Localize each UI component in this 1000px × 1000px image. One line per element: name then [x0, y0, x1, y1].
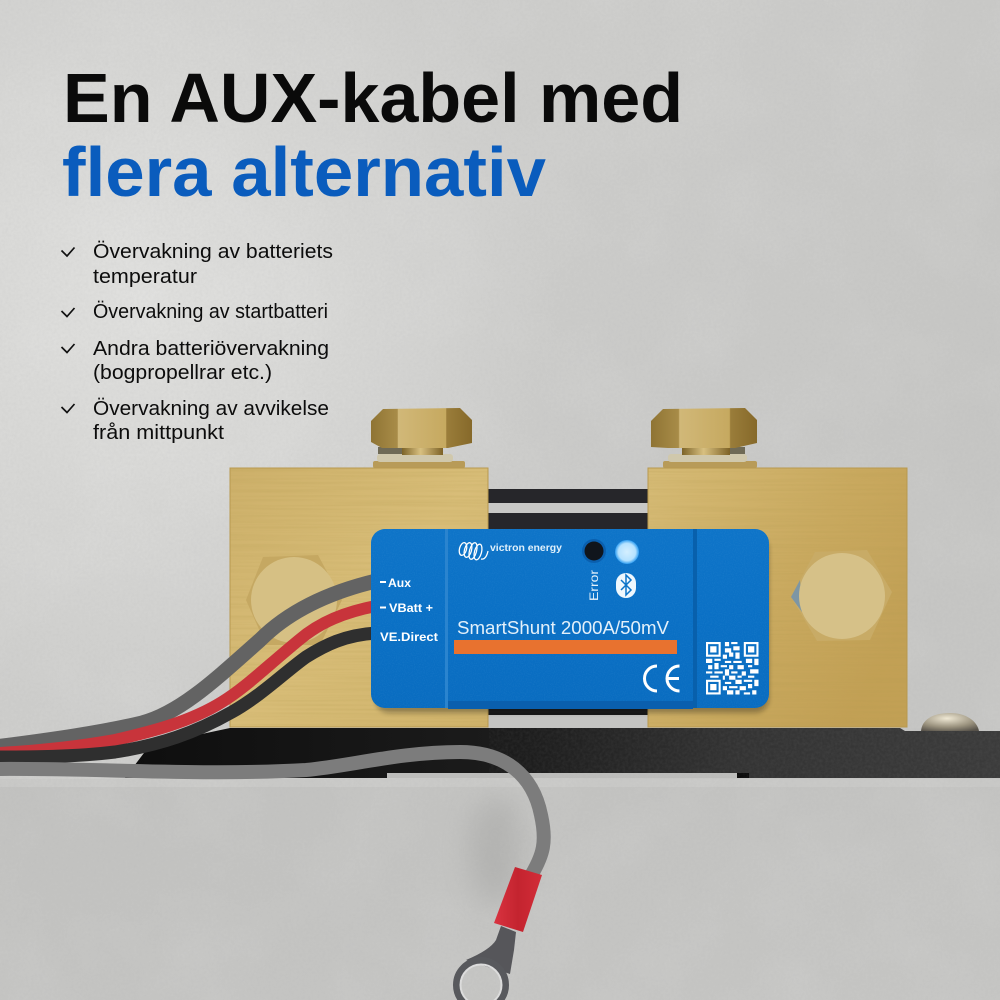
port labels: VBatt + — [389, 603, 433, 615]
checklist — [62, 241, 333, 444]
port labels: Aux — [388, 578, 412, 590]
item: second battery: (bogpropellrar etc.) — [93, 362, 272, 384]
concrete wall background — [0, 0, 1000, 780]
QR code — [706, 642, 758, 694]
victron logo: victron energy — [490, 542, 562, 554]
terminal bolt left — [371, 408, 472, 468]
model name: SmartShunt 2000A/50mV — [457, 618, 669, 638]
ring terminal — [456, 926, 516, 1000]
status LED — [615, 540, 639, 564]
item: battery temperature: Övervakning av batteriets — [93, 241, 333, 263]
red crimp ferrule — [494, 867, 542, 932]
item: midpoint deviation: Övervakning av avvikelse — [93, 398, 329, 420]
item: battery temperature: temperatur — [93, 266, 197, 288]
chrome screw — [921, 713, 979, 731]
dark mounting plate — [125, 728, 1000, 778]
hex bolt left — [246, 555, 342, 645]
cable: loose grey lead — [0, 752, 544, 874]
title — [62, 59, 683, 211]
port labels: VE.Direct — [380, 632, 438, 644]
item: second battery — [62, 338, 329, 384]
title: En AUX-kabel med — [63, 59, 683, 137]
error LED — [582, 539, 606, 601]
item: second battery: Andra batteriövervakning — [93, 338, 329, 360]
port labels — [380, 578, 438, 644]
victron logo — [458, 542, 562, 561]
title: flera alternativ — [62, 133, 546, 211]
item: starter battery: Övervakning av startbatteri — [93, 301, 328, 323]
cable: red vbatt — [0, 606, 376, 753]
shunt centre fins — [488, 489, 648, 728]
cable: black ve.direct — [0, 633, 376, 757]
hex bolt right — [791, 550, 892, 641]
case seams — [445, 529, 697, 708]
error LED: Error — [589, 570, 601, 601]
cable: grey aux — [0, 581, 376, 747]
concrete ledge — [0, 779, 1000, 1000]
item: battery temperature — [62, 241, 333, 288]
cables to device — [0, 581, 376, 757]
SmartShunt device — [371, 529, 769, 713]
icon: CE mark — [644, 666, 680, 691]
item: midpoint deviation — [62, 398, 329, 444]
terminal bolt right — [651, 408, 757, 468]
brass block left — [230, 468, 488, 727]
orange bar — [454, 640, 677, 654]
item: midpoint deviation: från mittpunkt — [93, 422, 224, 444]
grey aux cable with ring terminal — [0, 752, 544, 1000]
icon: bluetooth — [616, 573, 636, 598]
brass block right — [648, 468, 907, 727]
